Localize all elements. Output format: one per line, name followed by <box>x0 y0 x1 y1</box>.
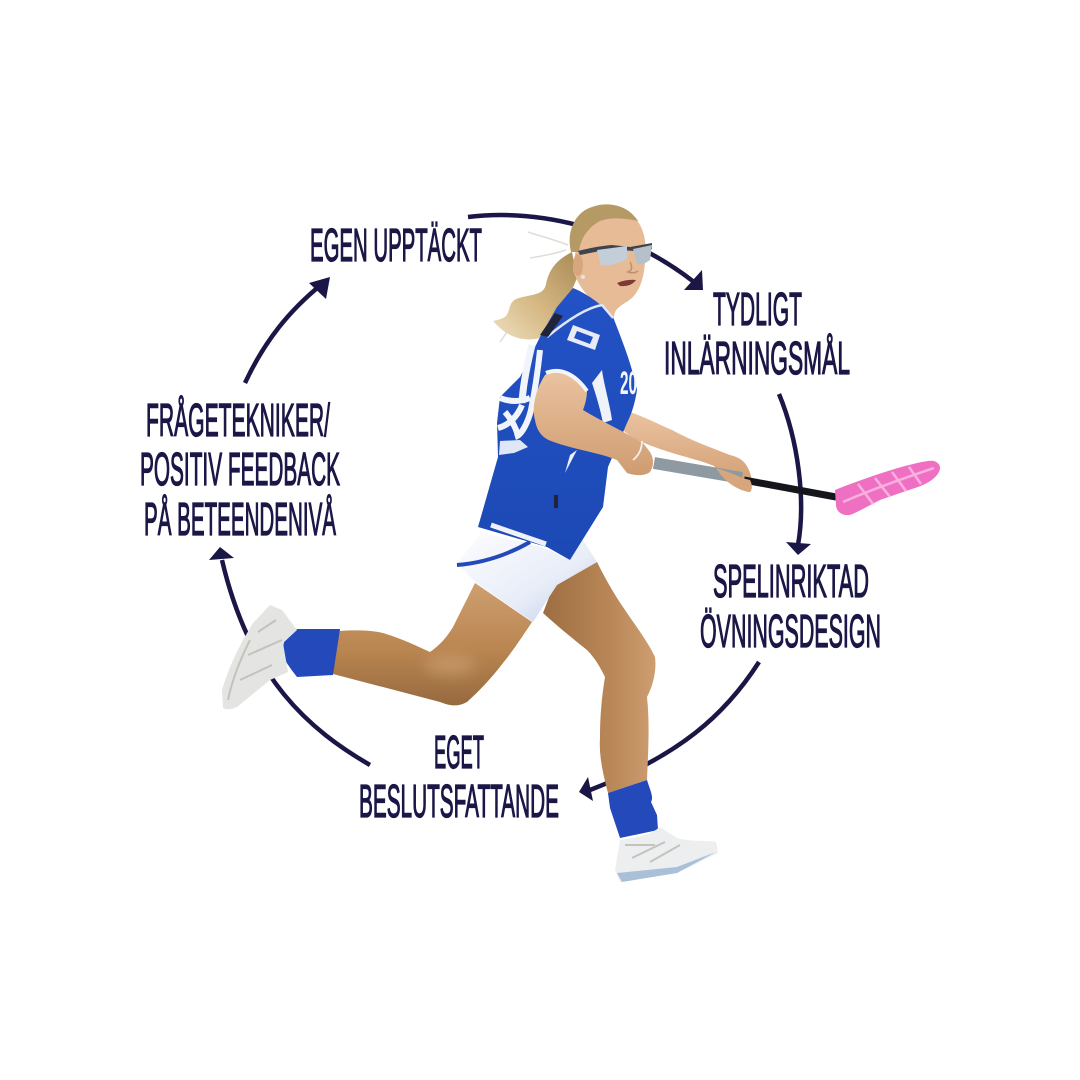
back shoe <box>222 605 297 709</box>
front shoe <box>615 827 718 882</box>
safety glasses <box>578 243 652 265</box>
shorts <box>457 532 597 622</box>
arrow: spelinriktad övningsdesign to eget beslutsfattande <box>579 662 759 801</box>
ear and earring <box>573 254 585 279</box>
nose and mouth <box>617 262 638 286</box>
infographic: learning cycle around floorball player: FRÅGETEKNIKER/ <box>146 394 330 446</box>
arrow: eget beslutsfattande to frågetekniker <box>209 547 370 765</box>
jersey collar piping <box>547 305 613 337</box>
back leg sock <box>282 629 340 677</box>
hair top <box>570 204 638 252</box>
near arm <box>534 372 653 475</box>
collar dark print <box>540 313 563 337</box>
label: frågetekniker, positiv feedback på beteendenivå <box>140 394 340 545</box>
infographic: learning cycle around floorball player: INLÄRNINGSMÅL <box>664 332 850 384</box>
back leg highlight <box>424 655 476 675</box>
label: eget beslutsfattande: EGET <box>434 726 484 778</box>
jersey lower print <box>499 440 528 455</box>
arrow: frågetekniker to egen upptäckt <box>245 277 330 383</box>
label: spelinriktad övningsdesign: SPELINRIKTAD <box>713 555 869 607</box>
infographic: learning cycle around floorball player: ÖVNINGSDESIGN <box>700 605 881 657</box>
far hand fingers <box>716 468 752 492</box>
front leg <box>543 562 655 793</box>
infographic: learning cycle around floorball player: POSITIV FEEDBACK <box>140 443 340 495</box>
label: spelinriktad övningsdesign <box>700 555 881 657</box>
bracelet <box>633 441 642 460</box>
label: tydligt inlärningsmål: TYDLIGT <box>713 283 802 335</box>
player photo illustration: 20 <box>620 365 637 401</box>
shoulder logo <box>567 325 600 350</box>
front leg sock <box>608 780 658 838</box>
infographic: learning cycle around floorball player: EGEN UPPTÄCKT <box>310 219 482 271</box>
sleeve cuff <box>546 371 587 391</box>
jersey <box>478 288 637 560</box>
arrow: tydligt inlärningsmål to spelinriktad övningsdesign <box>779 394 811 555</box>
label: tydligt inlärningsmål <box>664 283 850 384</box>
infographic: learning cycle around floorball player: BESLUTSFATTANDE <box>359 775 559 827</box>
neck and face <box>573 216 646 320</box>
back number <box>498 345 540 437</box>
jersey small slash <box>565 450 577 473</box>
jersey hem <box>491 525 546 544</box>
label: eget beslutsfattande <box>359 726 559 827</box>
shorts stripe <box>457 542 530 565</box>
infographic: learning cycle around floorball player: PÅ BETEENDENIVÅ <box>144 493 336 545</box>
ponytail <box>494 252 577 339</box>
floorball stick <box>654 461 940 515</box>
hair wisps <box>500 232 568 342</box>
player photo illustration <box>222 204 940 882</box>
jersey tag <box>554 495 558 508</box>
jersey side stripe <box>592 370 612 423</box>
back leg <box>333 583 532 705</box>
arrow: egen upptäckt to tydligt inlärningsmål <box>468 215 703 290</box>
far forearm <box>620 412 752 492</box>
